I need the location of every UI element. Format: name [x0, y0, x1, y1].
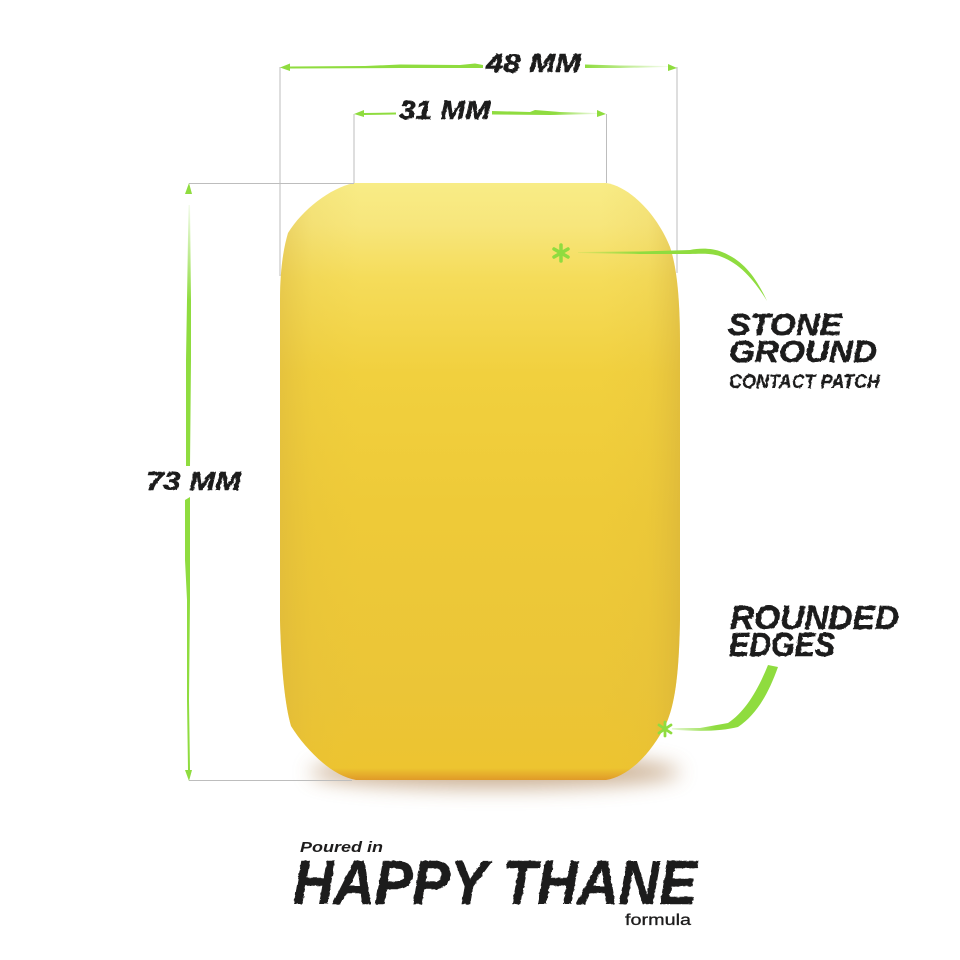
leader line [672, 665, 778, 731]
wheel shadow [310, 756, 680, 788]
callout text: STONE [728, 307, 843, 342]
dimension: 73 mm: 73 MM [146, 466, 243, 496]
gray extension lines [189, 67, 677, 780]
dimension: 73 mm [146, 183, 243, 781]
callout text: ROUNDED [730, 599, 899, 636]
callout text: CONTACT PATCH [729, 372, 881, 393]
dimension: 31 mm: 31 MM [399, 95, 492, 125]
asterisk marker [659, 722, 671, 736]
callout text: GROUND [729, 334, 877, 369]
dimension: 48 mm: 48 MM [485, 48, 583, 78]
asterisk marker [554, 245, 568, 261]
formula logo: formula [625, 912, 691, 929]
callout: stone ground contact patch [554, 245, 881, 393]
yellow wheel [280, 183, 680, 780]
dimension: 31 mm [354, 95, 606, 125]
leader line [578, 249, 767, 301]
formula logo: HAPPY THANE [293, 849, 698, 918]
callout text [728, 307, 881, 393]
callout text [729, 599, 899, 663]
callout text: EDGES [729, 626, 835, 663]
callout: rounded edges [659, 599, 899, 736]
formula logo: Poured in [300, 839, 383, 856]
dimension: 48 mm [280, 48, 677, 78]
